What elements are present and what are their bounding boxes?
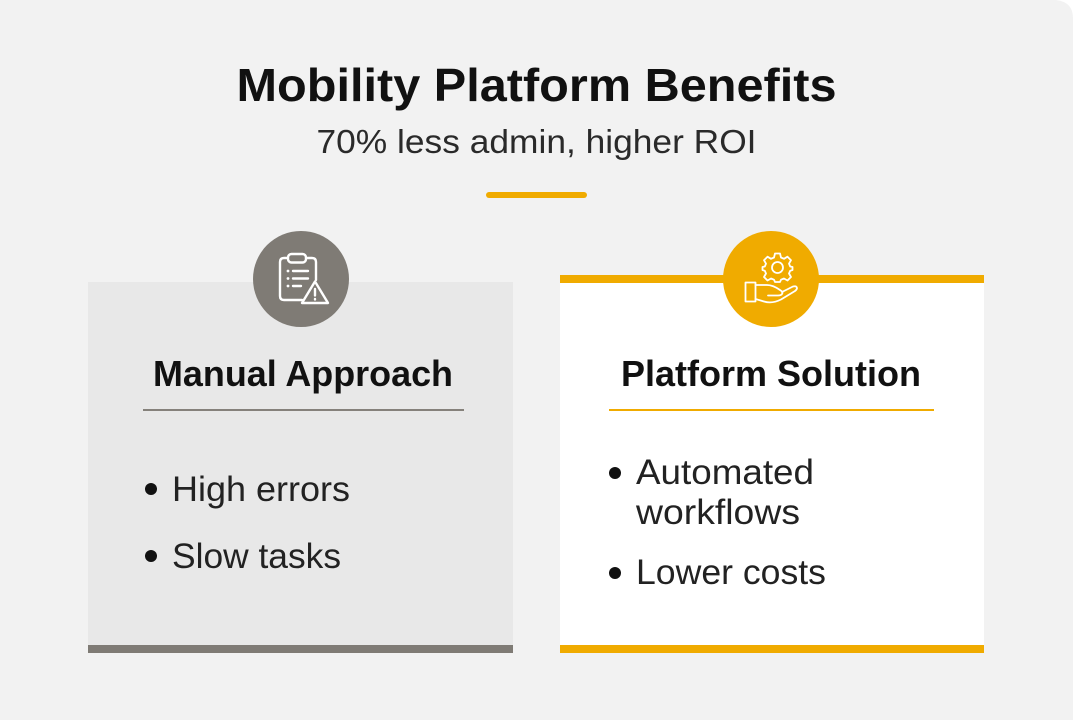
- title accent line: [486, 192, 587, 198]
- icon: hand holding gear: [723, 231, 819, 327]
- bullet list: platform solution: workflows: [635, 493, 800, 532]
- bullet list: platform solution: Lower costs: [636, 553, 826, 592]
- panel: platform solution: [560, 275, 984, 653]
- heading underline: [143, 409, 464, 411]
- bullet list: manual approach: [145, 470, 350, 576]
- bullet list: platform solution: [609, 453, 826, 592]
- panel bottom bar: [88, 645, 513, 653]
- panel bottom bar: [560, 645, 984, 653]
- panel: manual approach: [88, 282, 513, 653]
- icon: clipboard with warning: [253, 231, 349, 327]
- heading: manual approach: Manual Approach: [153, 353, 453, 394]
- title: Mobility Platform Benefits: [236, 59, 837, 111]
- panel background: [560, 275, 984, 653]
- bullet list: platform solution: Automated: [636, 453, 814, 492]
- panel top bar: [560, 275, 984, 283]
- bullet list: manual approach: Slow tasks: [172, 537, 341, 576]
- bullet list: manual approach: High errors: [172, 470, 350, 509]
- heading underline: [609, 409, 934, 411]
- heading: platform solution: Platform Solution: [621, 353, 921, 394]
- subtitle: 70% less admin, higher ROI: [316, 123, 756, 160]
- panel background: [88, 282, 513, 653]
